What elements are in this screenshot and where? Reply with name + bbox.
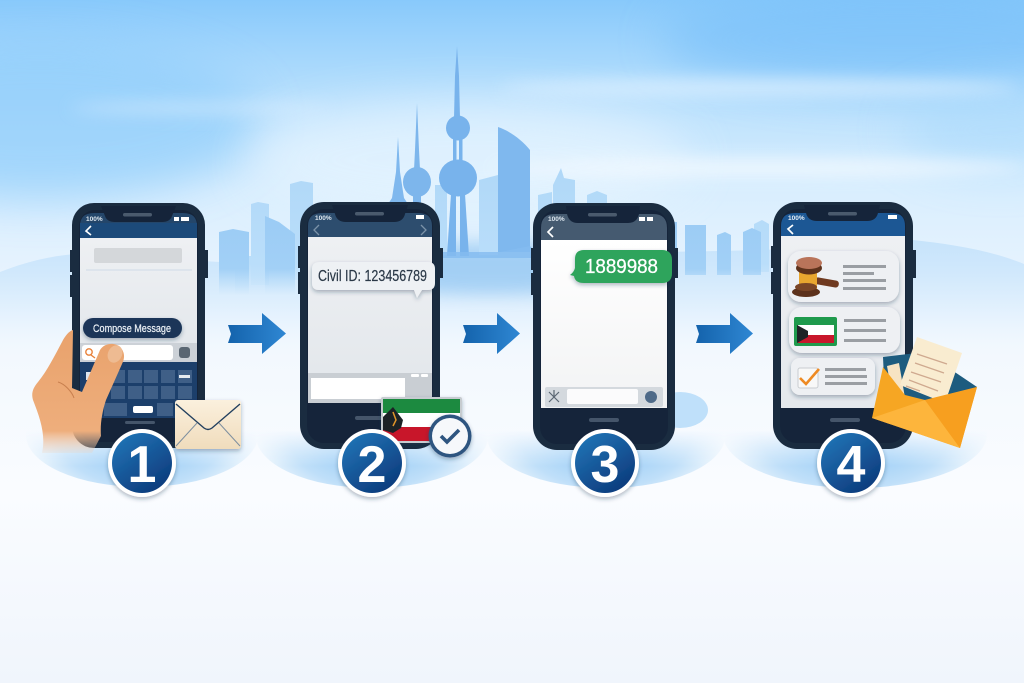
- sky cloud bands: [0, 0, 1024, 220]
- step 4 phone: [771, 202, 916, 449]
- phone 1 home bar: [125, 421, 155, 424]
- step 2 Kuwait flag: [381, 397, 462, 443]
- phone 2 screen: [308, 237, 432, 373]
- step badge 3: [571, 429, 639, 497]
- step 1 hand: [32, 330, 125, 453]
- step badge 4: 4: [837, 436, 866, 494]
- phone 1 dark bezel bottom: [79, 210, 198, 442]
- phone 1 notch: [101, 206, 176, 222]
- phone 1 compose button: Compose Message: [93, 323, 171, 335]
- step 2 check badge: [428, 414, 472, 458]
- infographic canvas: [0, 0, 1024, 502]
- phone 4 back chevron: [788, 225, 793, 234]
- phone 1 battery: [174, 217, 189, 221]
- letter back sheet: [887, 363, 905, 400]
- phone 3 input: [545, 387, 663, 407]
- step badge 1: 1: [128, 436, 156, 494]
- gavel card text lines: [843, 265, 886, 290]
- skyline: Kuwait City: [219, 46, 769, 295]
- small pool behind phone 3: [652, 392, 708, 428]
- green SMS bubble: [570, 250, 672, 283]
- step 3 phone: [531, 203, 678, 450]
- thumbnail: [105, 343, 125, 365]
- tower: main: [439, 46, 477, 256]
- phone 4 body: [773, 202, 913, 449]
- phone 1 grey bar: [94, 248, 182, 263]
- gavel icon: [792, 257, 839, 297]
- phone 1 status: 100%: [86, 216, 103, 223]
- central horizon glow: [320, 242, 660, 294]
- tower: middle: [403, 103, 431, 206]
- phone 3 screen: [541, 240, 667, 408]
- phone 1 body: [72, 203, 205, 448]
- step badge 3: 3: [591, 436, 619, 494]
- palm crease: [58, 382, 74, 398]
- tower: small spire: [388, 137, 408, 204]
- envelope front: [872, 367, 977, 448]
- phone 4 screen: [781, 236, 905, 408]
- phone 2 body: [300, 202, 440, 449]
- step 1 phone: [70, 203, 208, 448]
- civil id bubble: Civil ID: 123456789: [318, 268, 427, 285]
- step 2 phone: [298, 202, 443, 449]
- step 4 open envelope with letter: [872, 337, 977, 448]
- phone 2 home bar: [355, 416, 385, 420]
- phone 2 input: [308, 373, 432, 403]
- phone 2 chevrons: [314, 225, 426, 235]
- phone 2 header: [308, 213, 432, 237]
- phone 1 status area: [80, 213, 197, 238]
- phone 4 notch: [804, 205, 880, 221]
- phone 3 notch: [566, 206, 640, 223]
- step badge 2: 2: [358, 436, 386, 494]
- card: flag: [789, 307, 900, 353]
- skyline base strip: [443, 246, 540, 258]
- phone 4 status: 100%: [788, 215, 805, 222]
- phone 4 side buttons: [771, 246, 916, 294]
- letter: [900, 337, 962, 403]
- flag card text lines: [844, 319, 886, 342]
- phone 1 back chevron: [86, 226, 91, 235]
- phone 3 body: [533, 203, 675, 450]
- arrow 1: [228, 313, 286, 354]
- phone 3 home bar: [589, 418, 619, 422]
- phone 1 search strip: [80, 343, 197, 362]
- green SMS bubble: 1889988: [585, 256, 658, 278]
- phone 2 side buttons: [298, 246, 443, 294]
- ground pools under phones: [32, 434, 980, 488]
- card: checklist: [791, 358, 875, 395]
- step 1 envelope: [175, 400, 241, 449]
- phone 4 header: [781, 213, 905, 236]
- phone 1 header: [80, 223, 197, 238]
- arrow 3: [696, 313, 753, 354]
- civil id bubble: [312, 262, 435, 298]
- phone 3 status: 100%: [548, 216, 565, 223]
- phone 3 side buttons: [531, 248, 678, 295]
- small flag icon: [794, 317, 837, 346]
- arrow 2: [463, 313, 520, 354]
- card: gavel: [788, 251, 899, 302]
- phone 3 header: [541, 214, 667, 240]
- mid-tone buildings: [219, 216, 761, 295]
- phone 3 back chevron: [548, 227, 553, 237]
- phone 2 notch: [332, 205, 408, 222]
- phone 1 compose button: [83, 318, 182, 338]
- step badge 1: [108, 429, 176, 497]
- phone 1 side buttons: [70, 250, 208, 297]
- horizon haze band: [0, 240, 1024, 360]
- phone 1 speaker: [123, 213, 152, 216]
- phone 2 status: 100%: [315, 215, 332, 222]
- envelope back: [883, 352, 977, 420]
- step badge 2: [338, 429, 406, 497]
- landmark: Al Hamra tower: [498, 127, 530, 252]
- step badge 4: [817, 429, 885, 497]
- light background buildings: [235, 168, 769, 295]
- phone 1 screen: [80, 238, 197, 343]
- phone 4 home bar: [830, 418, 860, 422]
- phone 1 keyboard: [80, 362, 197, 418]
